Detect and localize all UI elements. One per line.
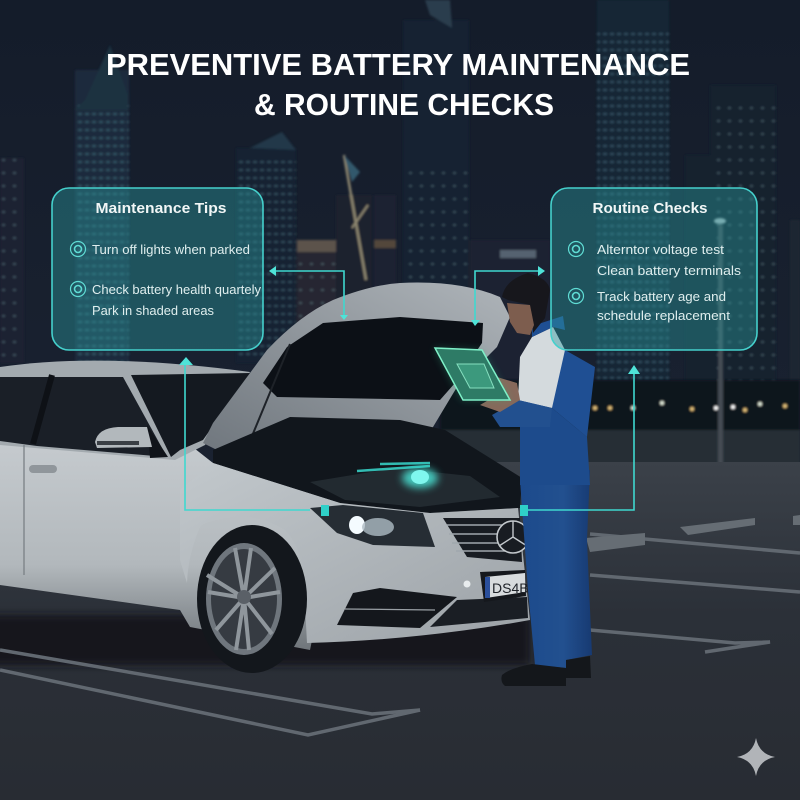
distant horizon lights [440, 218, 800, 466]
car: lower air intake [337, 588, 457, 628]
title: PREVENTIVE BATTERY MAINTENANCE [106, 47, 690, 82]
car: front fender and bumper [180, 463, 530, 643]
mechanic [480, 273, 595, 686]
arrow: mechanic to routine checks [520, 365, 640, 516]
icon: bullet one [568, 242, 584, 256]
mechanic: hands [480, 377, 520, 412]
car: front wheel [197, 525, 307, 673]
mechanic: arm [492, 400, 552, 427]
check: track battery age: Track battery age and [597, 289, 726, 304]
car: body side [0, 437, 340, 650]
car: hood [203, 283, 510, 450]
car: hood underside [263, 317, 483, 400]
engine glow [357, 463, 438, 488]
arrow: headlight to maintenance tips [179, 357, 329, 516]
icon: bullet two [70, 282, 86, 296]
car: license plate [480, 570, 529, 602]
car: license plate: DS4B [492, 580, 529, 596]
car [0, 283, 530, 673]
check: clean battery terminals: Clean battery terminals [597, 263, 742, 278]
car: headlight [310, 505, 435, 547]
tip: turn off lights: Turn off lights when parked [92, 242, 250, 257]
car: grille [443, 518, 529, 562]
tip: park in shaded areas: Park in shaded areas [92, 303, 214, 318]
heading: maintenance tips: Maintenance Tips [96, 200, 226, 217]
arrow: hood to maintenance tips [269, 266, 348, 320]
tip: check battery health: Check battery health quartely [92, 282, 261, 297]
mechanic: legs [520, 470, 592, 668]
arrow: hood to routine checks [471, 266, 545, 326]
ground: parking lot [0, 462, 800, 800]
car: door handle [29, 465, 57, 473]
mechanic: torso [520, 400, 590, 485]
check: schedule replacement: schedule replacement [597, 308, 730, 323]
car: roof and windows [0, 361, 250, 460]
car: hood strut [238, 344, 290, 470]
panel: routine checks [551, 188, 757, 350]
check: alternator voltage test: Alterntor voltage test [597, 242, 724, 257]
heading: routine checks: Routine Checks [592, 200, 708, 217]
parking lines [0, 515, 800, 735]
car: side mirror [95, 425, 168, 458]
holographic tablet [434, 348, 510, 400]
title: & ROUTINE CHECKS [254, 87, 554, 122]
city skyline [0, 0, 800, 420]
icon: sparkle star [737, 738, 775, 776]
car: engine bay [213, 417, 522, 513]
mechanic: head [502, 273, 550, 335]
icon: bullet one [70, 242, 86, 256]
mechanic: collar [532, 316, 565, 337]
panel: maintenance tips [52, 188, 263, 350]
title [106, 47, 690, 122]
icon: bullet two [568, 288, 584, 304]
mechanic: shoes [501, 664, 566, 686]
